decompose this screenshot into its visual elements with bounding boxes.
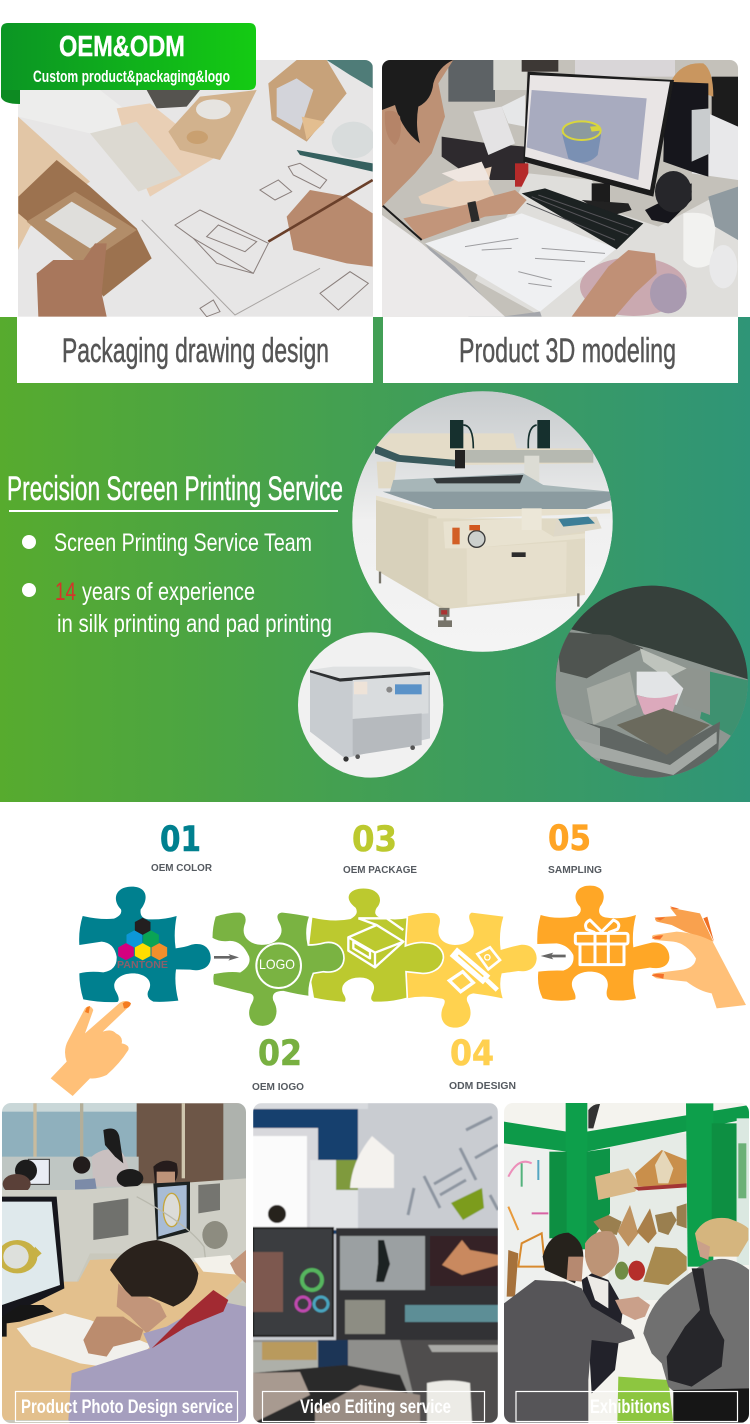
banner: OEM & ODM: Custom product&packaging&logo	[33, 67, 230, 86]
step 02: OEM IOGO	[252, 1081, 304, 1093]
banner: OEM & ODM	[1, 23, 256, 104]
puzzle piece 03: OEM package	[307, 888, 443, 1003]
icon: pinching hand	[652, 906, 746, 1008]
caption: product photo design service: Product Photo Design service	[21, 1397, 233, 1418]
heading: precision screen printing service: Precision Screen Printing Service	[7, 470, 343, 508]
label: product 3D modeling	[383, 317, 738, 383]
caption: video editing service	[262, 1392, 484, 1422]
photo: product photo design service	[0, 1103, 247, 1423]
step 02	[252, 1034, 304, 1093]
bullet: service team: Screen Printing Service Team	[54, 529, 312, 557]
step 04: 04	[450, 1034, 494, 1074]
photo: packaging drawing design	[18, 60, 375, 317]
photo: product 3D modeling	[382, 60, 738, 317]
step 01: OEM COLOR	[151, 862, 212, 874]
photo: video editing service	[253, 1103, 498, 1423]
step 05	[548, 819, 602, 876]
photo circle: flatbed screen printing machine	[352, 391, 613, 652]
bullet: years of experience	[22, 578, 332, 638]
step 03: OEM PACKAGE	[343, 864, 417, 876]
label: packaging drawing design	[17, 317, 373, 383]
bullet: years of experience: in silk printing and pad printing	[57, 610, 332, 638]
bullet: years of experience: 14	[55, 578, 76, 606]
caption: exhibitions: Exhibitions	[590, 1397, 670, 1418]
pantone label: PANTONE	[117, 960, 168, 971]
step 03: 03	[352, 820, 397, 860]
photo circle: pad printing machine	[550, 582, 750, 778]
puzzle piece 01: OEM color	[79, 887, 211, 1002]
step 02: 02	[258, 1034, 302, 1074]
caption: product photo design service	[16, 1392, 238, 1422]
puzzle piece 02: OEM logo	[212, 912, 344, 1027]
puzzle piece 04: ODM design	[407, 913, 537, 1028]
caption: video editing service: Video Editing service	[300, 1397, 451, 1418]
step 04	[449, 1034, 516, 1092]
arrow: into logo piece	[214, 954, 239, 961]
step 04: ODM DESIGN	[449, 1080, 516, 1092]
bullet: years of experience: years of experience	[82, 578, 255, 606]
puzzle numbers and captions	[151, 819, 602, 1093]
banner: OEM & ODM: OEM&ODM	[59, 31, 185, 63]
step 01: 01	[160, 820, 201, 860]
caption: exhibitions	[516, 1392, 738, 1422]
step 01	[151, 820, 212, 874]
photo circle: exposure unit	[298, 632, 443, 778]
icon: pointing hand	[51, 1001, 131, 1096]
logo label: LOGO	[259, 956, 295, 972]
puzzle piece 05: sampling	[537, 886, 669, 1001]
step 05: SAMPLING	[548, 864, 602, 876]
step 03	[343, 820, 417, 876]
label: packaging drawing design: Packaging drawing design	[62, 332, 329, 370]
step 05: 05	[548, 819, 591, 859]
green service band background	[0, 317, 750, 802]
photo: exhibitions	[504, 1103, 749, 1423]
arrow: into sampling piece	[541, 953, 566, 959]
